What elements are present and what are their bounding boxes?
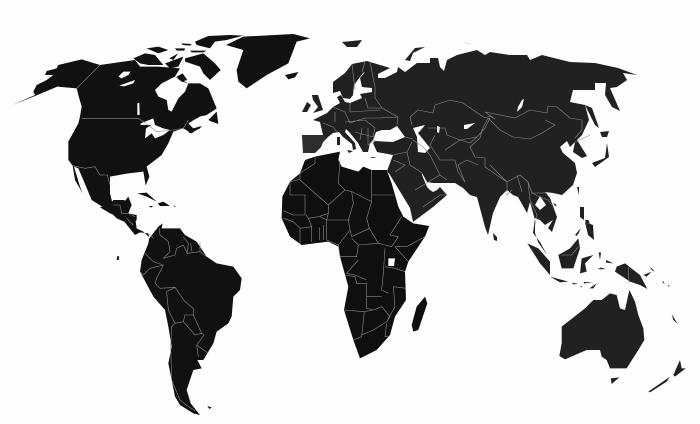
Indochina gap <box>535 196 546 210</box>
Java and Lesser Sunda <box>550 277 597 288</box>
Lake Victoria <box>388 258 395 266</box>
Canada-US-Mexico borders <box>73 65 188 212</box>
Australia <box>559 290 644 368</box>
Lake Baikal <box>517 99 524 112</box>
Gulf of St Lawrence <box>192 116 207 127</box>
New Guinea <box>615 263 647 289</box>
Arctic islands <box>133 35 243 133</box>
Greenland <box>226 34 310 88</box>
Africa <box>282 152 429 358</box>
Sumatra <box>527 243 550 275</box>
Great Bear Lake <box>118 72 131 78</box>
Pacific islands <box>643 267 678 324</box>
Caspian Sea <box>413 125 430 153</box>
New Zealand <box>648 360 686 392</box>
Madagascar <box>412 297 427 332</box>
Tasmania <box>611 377 619 384</box>
Spain <box>303 135 328 153</box>
Great Slave Lake <box>119 80 135 86</box>
Eurasia borders <box>323 61 590 225</box>
Moluccas and Philippines fragments <box>577 220 613 269</box>
Southeast Asia and Oceania <box>527 220 686 392</box>
Iceland <box>285 72 298 79</box>
British Isles and Atlantic islands <box>302 39 473 158</box>
Caribbean islands <box>137 193 176 207</box>
Sulawesi <box>580 255 593 273</box>
Galapagos <box>117 256 119 260</box>
Lake Balkhash <box>464 123 475 129</box>
Eurasia <box>302 39 637 255</box>
Aral Sea <box>437 126 440 133</box>
North America <box>12 35 243 225</box>
South America borders <box>113 205 208 411</box>
Great Lakes <box>141 118 170 138</box>
Borneo <box>558 238 580 268</box>
Hudson Bay <box>155 77 188 112</box>
Japan, Sakhalin, Sri Lanka and East Asian islands <box>493 105 609 241</box>
Africa borders <box>283 157 425 340</box>
Borneo and New Guinea borders <box>562 247 629 283</box>
Lake Winnipeg <box>137 103 140 115</box>
South America <box>100 200 242 415</box>
Falkland Islands <box>207 406 212 409</box>
